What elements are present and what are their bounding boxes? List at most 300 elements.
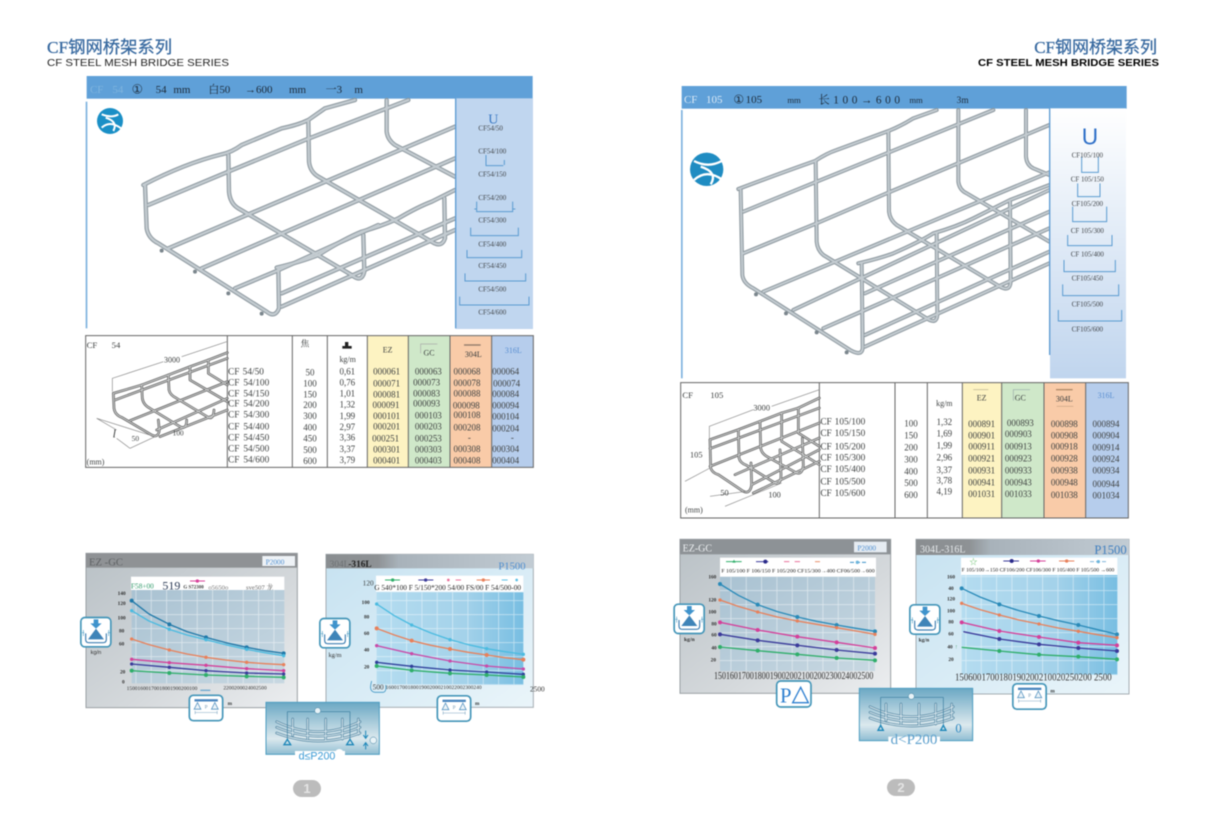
curves [718,582,877,662]
model names: CF [820,465,832,475]
column 316L: 000894 [1093,419,1120,429]
header bar CF105: 3m [957,96,969,106]
wire mesh tray photo [738,110,1049,354]
small tray drawing with dimensions: 50 [720,489,729,498]
column 304L: 304L [1056,394,1073,403]
header bar CF105: 长100→600 [818,93,900,106]
column EZ: 000921 [968,453,995,463]
column 316L: 000914 [1093,442,1120,452]
column EZ: 000091 [373,400,399,410]
logo [97,108,123,134]
side panel: section profiles CF105: CF105/450 [1072,275,1104,283]
panel: CF105 product view [681,86,1127,378]
icon: P triangle: P [780,686,791,708]
model names: 54/500 [243,444,270,454]
colored material columns [367,336,533,467]
column EZ: 000931 [968,465,995,475]
width column: 100 [303,379,317,389]
axis labels: 120 [947,597,955,603]
column GC: 001033 [1005,489,1032,499]
column EZ: 000301 [373,445,400,455]
width column: 200 [303,400,317,410]
width column: 500 [303,445,317,455]
axis labels: 80 [364,614,370,620]
column GC: 000083 [413,389,441,399]
weight column: 1,32 [936,417,952,427]
side panel: section profiles CF54: CF54/150 [478,170,507,178]
icon: load kg/n: kg/n [91,650,101,656]
model names: 105/150 [835,429,866,439]
model names: CF [228,423,239,433]
right page subtitle: CF STEEL MESH BRIDGE SERIES [978,57,1159,69]
model names [228,368,270,465]
model names [820,417,866,499]
column GC: 000203 [415,422,442,432]
header bar CF54: mm [173,84,191,96]
chart: 304L-316L P1500 left page [320,554,545,707]
left page title [47,38,229,69]
column EZ: 000901 [968,430,995,440]
header bar CF54: mm [289,84,307,96]
side panel: section profiles CF105: CF105/200 [1072,200,1104,208]
column 304L: 000918 [1051,441,1078,451]
chart header: -316L [348,560,372,570]
left page subtitle: CF STEEL MESH BRIDGE SERIES [47,57,229,69]
left edge line [681,110,683,378]
axis labels [708,574,873,682]
model names: CF [228,455,239,465]
header bar CF105: 105 [706,94,723,106]
weight column: 1,01 [339,389,355,399]
model names: CF [228,434,239,444]
axis labels: 40 [711,645,717,651]
column GC: 000063 [415,366,442,376]
chart header: 304L-316L [920,545,965,556]
right page title [978,38,1159,69]
column 304L [453,344,482,466]
header bar CF54: 白50 [208,83,231,96]
page number 2: 2 [897,780,905,795]
axis labels: 40 [948,586,954,592]
column 304L: 000948 [1051,477,1078,487]
side panel: section profiles CF54: CF54/50 [478,125,503,133]
icon: beam span right chart 2 [1013,684,1046,709]
weight column: 3,36 [339,433,356,443]
icon: P triangle [777,681,811,708]
legend: F 105/100 F 106/150 F 105/200 CF15/300→400 CF06/500→600 [721,570,875,575]
column GC: 000903 [1005,429,1032,439]
width column: 300 [904,455,918,465]
small tray drawing with dimensions: 105 [710,390,723,400]
chart frame [86,553,297,708]
icon: load kg/n: kg/n [919,637,930,643]
column 316L: 316L [505,346,522,355]
plot area [720,577,875,671]
column 316L [1093,391,1120,501]
weight column: 0,76 [339,378,356,388]
chart header: EZ-GC [683,544,712,555]
column GC: GC [1015,394,1026,403]
chart frame [916,539,1129,694]
column GC: 000403 [415,456,442,466]
axis labels: 60 [711,632,717,638]
small tray drawing with dimensions: CF [87,340,97,350]
model names: CF [820,453,832,463]
axis labels: 60 [364,631,370,637]
axis labels: 20 [711,657,716,663]
model names: 54/400 [243,423,270,433]
width column: 焦 [301,338,310,349]
legend [961,557,1117,575]
axis labels: 1506001700180190200210020250200 2500 [955,673,1112,684]
width column: 600 [303,456,317,466]
column EZ: 000251 [372,433,399,443]
model names: 54/200 [243,400,270,410]
column 316L: 000204 [492,424,520,434]
column GC: 000893 [1007,418,1034,428]
left edge line [86,102,87,328]
column 316L: 000064 [492,367,520,377]
column 304L: 000108 [454,410,481,420]
axis labels: 20 [364,664,370,670]
chart header: P2000 [857,544,876,553]
sagging tray sketch [277,708,377,749]
header bar CF54: ① [132,83,143,97]
axis labels: 2200200024002500 [223,685,267,691]
weight column: 0,61 [339,366,355,376]
model names: 105/100 [835,417,866,427]
chart: EZ-GC P2000 right page [674,539,891,693]
model names: CF [228,379,239,389]
weight column: 3,79 [339,455,356,465]
model names: 105/500 [835,477,866,487]
small tray drawing with dimensions [87,340,227,466]
axis labels: 60 [948,631,954,637]
axis labels: m [228,701,233,707]
column GC: 000103 [415,411,442,421]
header bar CF105: 105 [746,94,763,106]
model names: 54/100 [243,379,270,389]
icon: load kg/n: kg/n [684,637,696,643]
column 316L: 000934 [1093,465,1120,475]
legend [131,577,284,593]
legend: ☆ [969,557,977,566]
model names: CF [820,429,832,439]
model names: 105/600 [835,489,866,499]
chart: EZ-GC P2000 left page [81,553,297,708]
deflection formula: d<P200 [891,732,937,748]
legend [363,576,523,592]
width column: 100 [904,419,918,429]
side panel: section profiles CF54: CF54/300 [478,216,507,224]
header bar CF105: mm [787,95,801,105]
axis labels: 100 [708,609,717,615]
axis labels: m [475,701,480,707]
chart header [680,539,891,555]
column GC: 000253 [415,434,442,444]
width column: 400 [904,467,918,477]
legend: F58+00 [131,582,154,591]
small tray drawing with dimensions: 105 [690,450,702,459]
page number 1 [293,780,321,797]
column 304L: - [468,433,471,443]
column GC: 000923 [1005,454,1032,464]
chart header [86,553,297,569]
icon: load kg/n [674,604,704,643]
chart header [916,539,1129,557]
column 304L: 000088 [454,389,481,399]
chart header: P1500 [498,562,526,573]
header bar CF54: 一3 [326,84,343,96]
page number 1: 1 [303,781,311,796]
header bar CF54 [87,76,533,99]
side panel: section profiles CF54: CF54/400 [478,240,507,248]
column 304L: 000408 [454,456,481,466]
small tray drawing with dimensions: 3000 [753,403,770,412]
axis labels: 500 [373,683,384,692]
header bar CF105: ① [733,93,744,107]
column 316L: 000074 [493,378,521,388]
legend: G 540*100 F 5/150*200 54/00 FS/00 F 54/500-00 [374,584,522,592]
column 304L: 000098 [453,400,480,410]
header bar CF54: 54 [112,84,124,96]
side panel: section profiles CF105: CF 105/300 [1071,227,1104,235]
header bar CF54: 54 [156,84,167,96]
weight column: kg/m [339,355,357,364]
column GC [413,344,442,466]
small tray drawing with dimensions: 3000 [164,356,180,365]
legend: o5650o [208,584,229,591]
column EZ: 000201 [373,422,400,432]
axis labels: ↑ [955,645,958,651]
axis labels: 80 [711,622,717,628]
icon: load kg/n [910,605,940,643]
axis labels: 140 [118,591,126,597]
side panel: section profiles CF105: CF105/600 [1072,326,1104,334]
weight column: 2,97 [339,422,356,432]
axis labels: 20 [948,657,954,663]
weight column: 3,78 [936,475,953,485]
header bar CF54: →600 [245,84,273,96]
logo [690,153,723,186]
legend: sve507 龙 [246,582,274,591]
column 316L: 000304 [492,444,520,454]
column 316L: 316L [1098,391,1115,400]
icon: beam span left chart 2 [437,696,471,721]
column 304L: 000208 [454,423,481,433]
column GC: 000073 [413,378,441,388]
side panel: section profiles CF105: CF105/500 [1072,300,1104,308]
side panel: section profiles CF105: CF 105/150 [1071,175,1104,183]
small tray drawing with dimensions: 50 [132,434,139,443]
column 316L: - [511,433,514,443]
width column: 400 [303,422,317,432]
weight column: 1,99 [936,441,953,451]
left page title: CF钢网桥架系列 [47,38,172,57]
column 316L: 000084 [492,389,520,399]
column GC: 000303 [415,444,442,454]
axis labels: 0 [122,679,125,685]
side panel: section profiles CF105: U [1082,123,1098,149]
chart: 304L-316L P1500 right page [910,539,1129,694]
column 316L: 000944 [1093,479,1120,489]
model names: CF [820,442,832,452]
chart header: P2000 [266,557,285,566]
small tray drawing with dimensions: 54 [112,340,121,350]
table grid [681,383,1128,518]
right page title: CF钢网桥架系列 [1034,38,1157,57]
column EZ: 000101 [373,411,400,421]
small tray drawing with dimensions: 100 [768,490,781,499]
column EZ [372,346,400,466]
weight column: 3,37 [339,444,356,454]
plot area [377,592,523,685]
weight column: 1,99 [339,411,356,421]
column 304L: 000068 [454,366,481,376]
axis labels: 120 [708,598,717,604]
weight column [339,342,357,465]
legend: F 105/100→150 CF106/200 CF106/300 F 105/400 F 105/500 →600 [962,569,1115,574]
column EZ: EZ [977,394,987,403]
axis labels: 40 [364,648,370,654]
column EZ [968,390,995,499]
width column: 500 [904,478,918,488]
small tray drawing with dimensions: l [113,426,117,440]
column EZ: EZ [383,346,393,355]
column GC: 000943 [1005,478,1032,488]
column GC: 000093 [413,399,441,409]
axis labels: 2500 [530,685,545,694]
column 304L: 000078 [454,378,481,388]
axis labels: 60 [119,642,125,648]
column EZ: 000891 [968,419,995,429]
header bar CF54: CF [90,84,103,96]
axis labels: 120 [118,601,126,607]
weight column: 1,69 [936,429,953,439]
column 304L: 000908 [1051,430,1078,440]
side panel: section profiles CF105: CF105/100 [1072,151,1104,159]
header bar CF105: CF [684,94,697,106]
side panel: section profiles CF105 [1049,108,1126,378]
weight column [936,399,953,497]
axis labels [947,575,1112,694]
model names: 54/150 [243,390,270,400]
icon: load kg/n [81,617,111,656]
column 316L: 001034 [1093,491,1120,501]
axis labels: 100 [947,609,955,615]
model names: CF [820,489,832,499]
width column: 300 [303,411,317,421]
side panel: section profiles CF54 [455,98,533,329]
column 316L: 000924 [1093,454,1120,464]
model names: CF [228,400,239,410]
column 316L: 000094 [492,400,520,410]
model names: CF [820,477,832,487]
deflection formula: d≤P200 [299,751,335,763]
axis labels: 160 [947,575,955,581]
icon: load kg/m: kg/m [328,652,342,659]
weight column: 3,37 [936,465,953,475]
side panel: section profiles CF105: CF 105/400 [1071,251,1104,259]
axis labels: 20 [120,669,126,675]
width column: 150 [303,390,317,400]
column GC: 000913 [1005,441,1032,451]
chart header [326,554,533,573]
icon: beam span left chart 1 [189,695,223,721]
column 304L: 001038 [1051,490,1078,500]
model names: CF [228,411,239,421]
column 316L: 000404 [492,456,520,466]
model names: 54/450 [243,434,270,444]
deflection diagram left page [266,702,379,763]
side panel: section profiles CF54: U [488,113,498,128]
column GC: 000933 [1005,465,1032,475]
column 304L: 000308 [454,444,481,454]
chart header: 304L [330,560,350,570]
axis labels: 1501601700180019002002100200230024002500 [714,671,873,682]
axis labels: m [1050,688,1055,694]
curves [130,599,286,679]
column 304L: 304L [465,350,482,359]
header bar CF54: m [354,84,363,96]
legend: 519 [162,579,180,593]
width column: 50 [306,367,315,377]
column GC: GC [423,349,435,358]
small tray drawing with dimensions: (mm) [685,505,703,514]
header bar CF105 [682,86,1127,109]
small tray drawing with dimensions [682,390,819,514]
table grid [86,336,533,467]
sagging tray sketch: 0 [955,722,962,736]
column 304L: 000898 [1051,419,1078,429]
curves [375,602,525,679]
weight column: 1,32 [339,400,355,410]
weight column: 4,19 [936,487,953,497]
model names: 54/50 [243,368,264,378]
column EZ: 000081 [373,389,400,399]
small tray drawing with dimensions: 100 [173,428,184,437]
width column [301,338,317,466]
axis labels [362,600,545,707]
chart frame [680,539,891,693]
axis labels: 100 [118,615,126,621]
column 316L: 000104 [492,412,520,422]
column 316L: 000904 [1093,431,1120,441]
plot area [962,575,1117,675]
header bar CF105: mm [909,95,923,105]
side panel: section profiles CF54: CF54/500 [478,286,507,294]
column EZ: 000911 [968,441,995,451]
deflection diagram right page [859,688,973,748]
axis labels: 15001600170018001900200100 [127,686,197,692]
axis labels: 100 [362,600,370,606]
model names: CF [228,368,239,378]
plot area [132,590,284,683]
model names: CF [228,390,239,400]
curves [960,586,1119,661]
width column: 450 [303,434,317,444]
width column: 150 [904,430,918,440]
chart header: EZ -GC [89,558,123,569]
axis labels: 40 [947,645,953,651]
width column: 200 [904,442,918,452]
model names: 105/200 [835,442,866,452]
model names: CF [820,417,832,427]
column EZ: 000941 [968,478,995,488]
axis labels: 80 [948,619,954,625]
legend: G S72300 [183,586,204,591]
small tray drawing with dimensions: (mm) [87,457,105,466]
